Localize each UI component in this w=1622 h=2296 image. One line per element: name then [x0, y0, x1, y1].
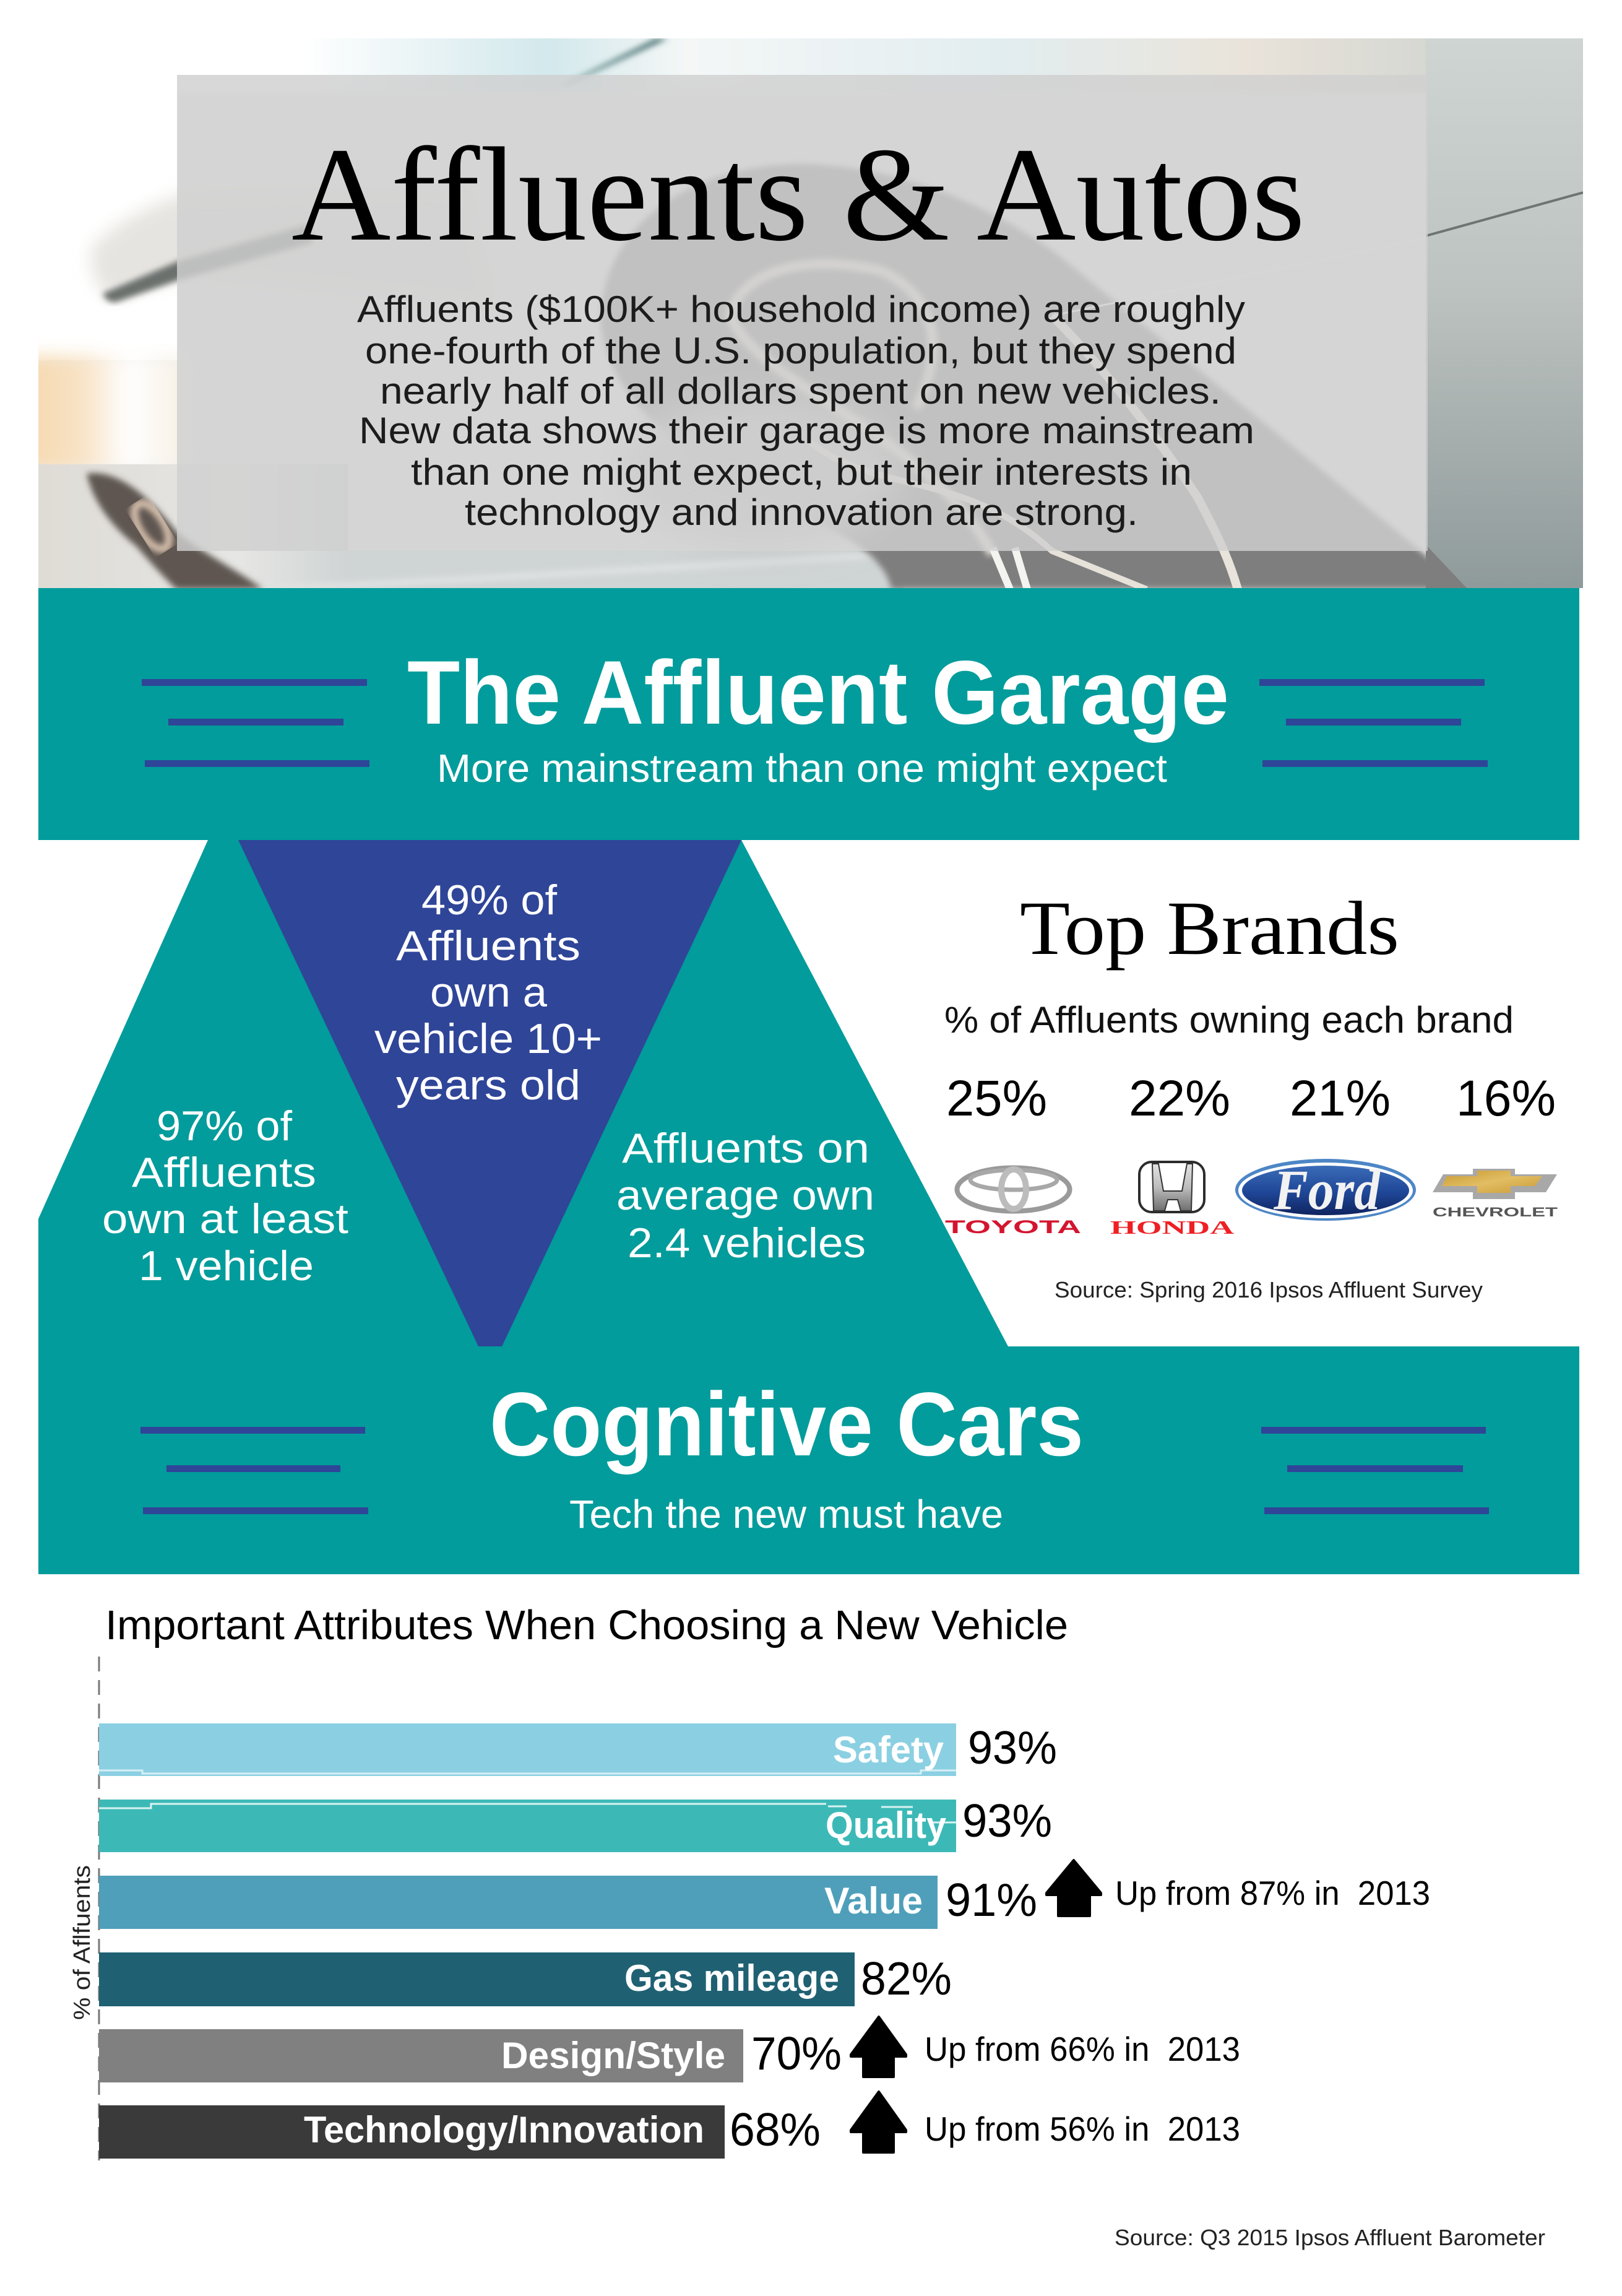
bar: gas mileage: 82% [861, 1952, 952, 2004]
bar: value [99, 1874, 1037, 1929]
bar: design/style [99, 2027, 842, 2082]
bar: value: Value [824, 1880, 923, 1921]
bar: technology/innovation [99, 2103, 821, 2159]
heading: cognitive cars: Cognitive Cars [490, 1374, 1084, 1475]
bar: technology/innovation: 68% [730, 2103, 821, 2155]
bar: value: 91% [946, 1874, 1037, 1926]
hero: blurred car photo background [25, 31, 1583, 589]
arrow: technology up [851, 2092, 906, 2152]
stat: 97% own at least 1 vehicle [102, 1103, 348, 1289]
subheading: more mainstream: More mainstream than one might expect [437, 746, 1167, 791]
logo: honda [1110, 1162, 1235, 1238]
stat: 49% own vehicle 10+ years old: 49% of [421, 877, 557, 924]
top brands subtitle: % of Affluents owning each brand [944, 999, 1514, 1041]
brand percentages [946, 1070, 1556, 1127]
y axis label: % of Aflfuents [69, 1865, 95, 2020]
bar: technology/innovation: Technology/Innovation [304, 2109, 704, 2151]
logo: chevrolet [1433, 1169, 1558, 1219]
stat: 97% own at least 1 vehicle: 97% of [157, 1103, 292, 1150]
stat: average 2.4 vehicles: average own [616, 1172, 874, 1219]
bar chart: important attributes [69, 1657, 1057, 2160]
stat: 49% own vehicle 10+ years old: own a [430, 969, 547, 1016]
arrow: design up [851, 2017, 906, 2077]
brand percentages: 25% [946, 1070, 1047, 1127]
chart title: Important Attributes When Choosing a New Vehicle [105, 1602, 1068, 1648]
bar: safety: Safety [833, 1729, 944, 1770]
subheading: tech the new must have: Tech the new must have [569, 1492, 1003, 1536]
teal mountains panel [38, 840, 1008, 1346]
stat: 49% own vehicle 10+ years old: vehicle 10+ [374, 1015, 602, 1062]
logo: ford: Ford [1273, 1158, 1381, 1221]
source: barometer: Source: Q3 2015 Ipsos Affluent Barometer [1115, 2225, 1545, 2250]
bar: quality: 93% [962, 1795, 1052, 1847]
title: Affluents & Autos [291, 120, 1305, 269]
bar: design/style: Design/Style [501, 2035, 725, 2076]
stat: 49% own vehicle 10+ years old [374, 877, 602, 1109]
bar: gas mileage: Gas mileage [624, 1957, 839, 1999]
teal band: cognitive cars [38, 1346, 1579, 1574]
stat: average 2.4 vehicles [616, 1125, 874, 1267]
bar: safety: 93% [968, 1722, 1057, 1774]
arrow: value up [1046, 1860, 1101, 1916]
note: design up from 66%: Up from 66% in 2013 [925, 2030, 1240, 2068]
teal band: the affluent garage [38, 588, 1579, 840]
stat: average 2.4 vehicles: 2.4 vehicles [628, 1219, 866, 1267]
bar: safety [99, 1722, 1057, 1776]
logo: chevrolet: CHEVROLET [1433, 1205, 1558, 1219]
top brands heading: Top Brands [1020, 886, 1399, 971]
stat: 49% own vehicle 10+ years old: Affluents [396, 922, 580, 969]
brand percentages: 16% [1456, 1070, 1556, 1127]
brand percentages: 22% [1129, 1070, 1230, 1127]
bar: design/style: 70% [751, 2027, 842, 2079]
logo: honda: HONDA [1110, 1216, 1235, 1238]
logo: ford [1235, 1158, 1416, 1221]
logo: toyota: TOYOTA [945, 1217, 1081, 1237]
intro paragraph: New data shows their garage is more mainstream [359, 410, 1254, 451]
source: top brands: Source: Spring 2016 Ipsos Affluent Survey [1055, 1277, 1483, 1302]
intro paragraph: technology and innovation are strong. [465, 492, 1138, 533]
logo: toyota [945, 1167, 1081, 1237]
brand percentages: 21% [1290, 1070, 1391, 1127]
bar: quality [99, 1795, 1052, 1852]
bar: gas mileage [99, 1952, 952, 2006]
intro paragraph: nearly half of all dollars spent on new vehicles. [380, 370, 1221, 412]
heading: the affluent garage: The Affluent Garage [407, 642, 1229, 743]
blue inverted triangle [238, 840, 741, 1346]
intro paragraph: than one might expect, but their interests in [411, 451, 1192, 493]
stat: average 2.4 vehicles: Affluents on [622, 1125, 869, 1172]
intro paragraph: one-fourth of the U.S. population, but they spend [365, 330, 1236, 371]
stat: 97% own at least 1 vehicle: Affluents [132, 1149, 316, 1196]
intro paragraph [357, 288, 1254, 533]
stat: 97% own at least 1 vehicle: own at least [102, 1195, 348, 1242]
note: technology up from 56%: Up from 56% in 2013 [925, 2110, 1240, 2148]
stat: 49% own vehicle 10+ years old: years old [396, 1062, 580, 1109]
stat: 97% own at least 1 vehicle: 1 vehicle [139, 1242, 314, 1289]
intro paragraph: Affluents ($100K+ household income) are roughly [357, 288, 1245, 330]
note: value up from 87%: Up from 87% in 2013 [1115, 1874, 1430, 1912]
bar: quality: Quality [826, 1804, 947, 1846]
hero translucent gray panel [177, 75, 1428, 551]
